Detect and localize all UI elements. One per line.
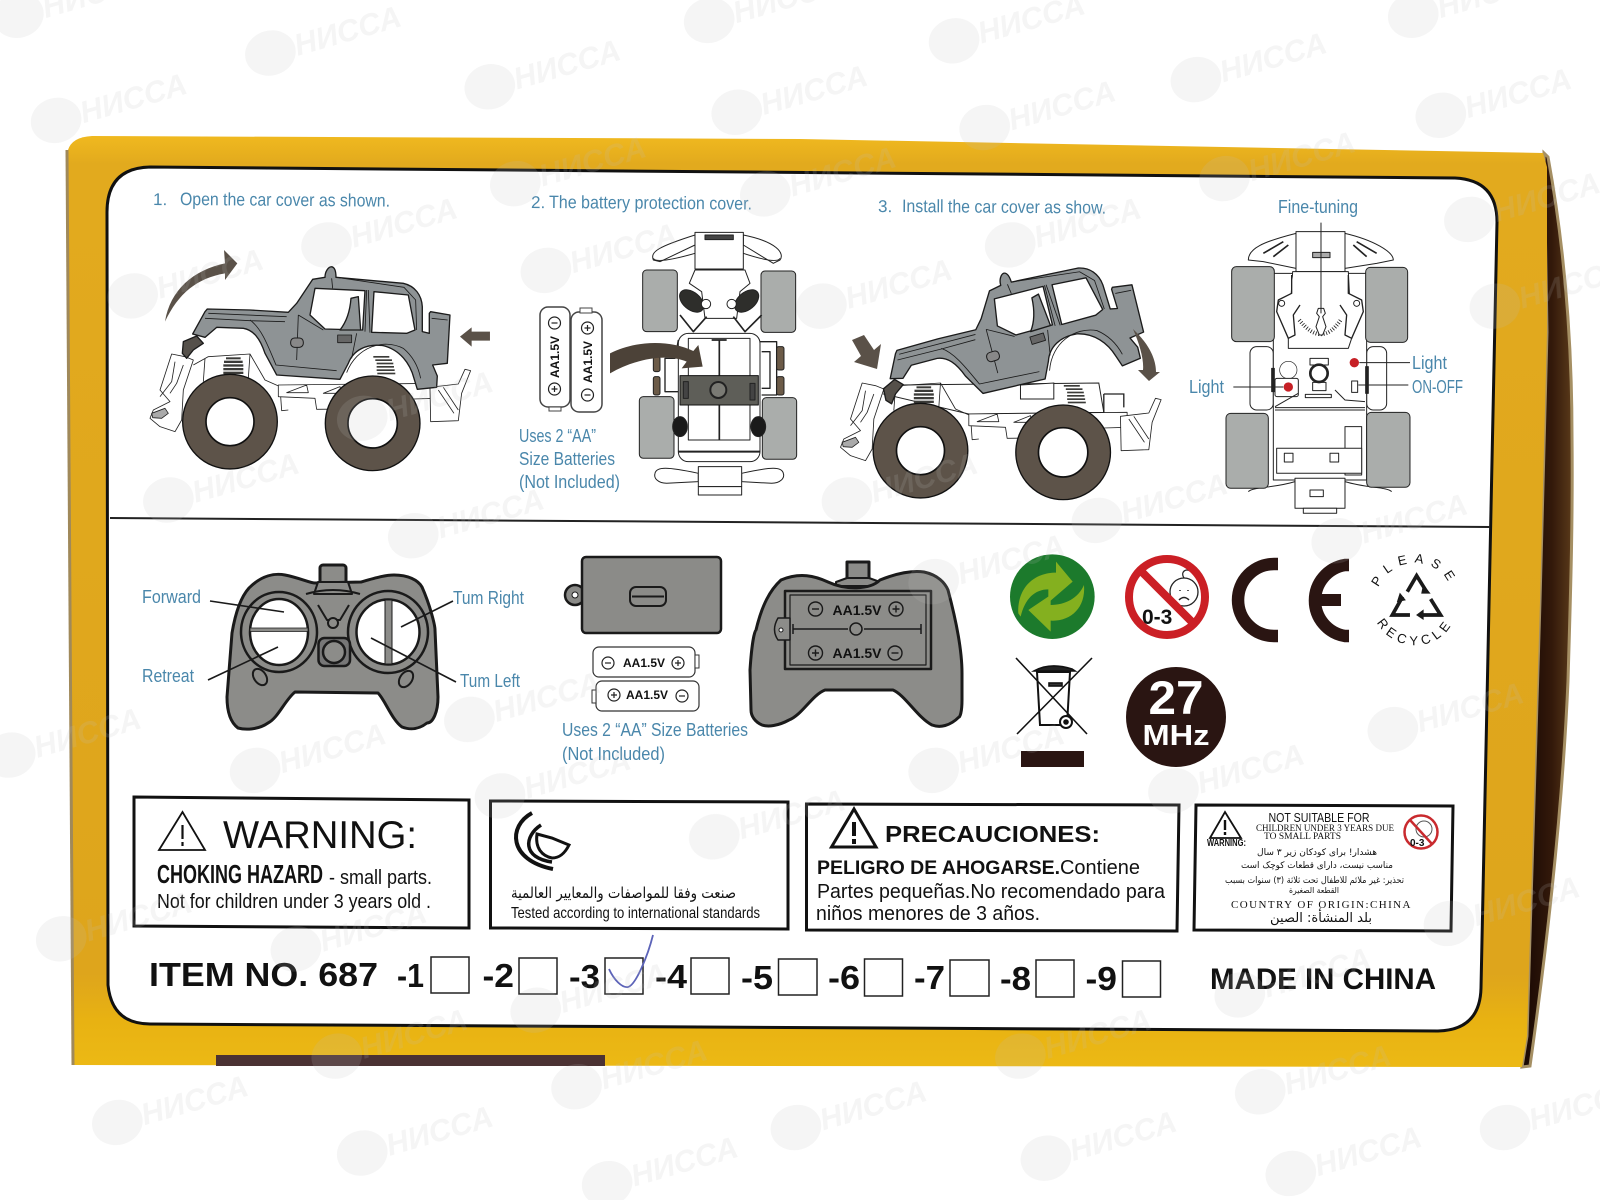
arrow: rotate down: [1133, 329, 1160, 381]
multi-language warning box: مناسب نیست، دارای قطعات کوچک است: [1241, 861, 1393, 871]
watermarks: НИССА: [566, 217, 681, 280]
watermarks: НИССА: [382, 365, 497, 428]
watermarks: НИССА: [30, 702, 145, 765]
icon: 27 MHz: MHz: [1142, 720, 1210, 752]
item number row: MADE IN CHINA: [1210, 963, 1436, 996]
battery note: [519, 426, 620, 492]
watermarks: НИССА: [867, 447, 982, 510]
watermarks: НИССА: [596, 1033, 711, 1096]
standards box: Tested according to international standards: [511, 905, 760, 922]
remote control back: AA1.5V: [832, 645, 882, 661]
multi-language warning box: بلد المنشأة: الصين: [1270, 908, 1372, 926]
multi-language warning box: WARNING:: [1207, 838, 1246, 849]
watermarks: НИССА: [346, 191, 461, 254]
watermarks: НИССА: [757, 59, 871, 122]
batteries vertical: AA1.5V: [548, 336, 562, 378]
arrow: push down: [852, 335, 881, 369]
icon: small age warning: 0-3: [1410, 838, 1425, 849]
icon: standards logo: [516, 813, 569, 869]
arrow: battery cover: [610, 343, 703, 373]
watermarks: НИССА: [1260, 941, 1374, 1004]
watermarks: НИССА: [357, 1003, 471, 1066]
variant checkboxes: [397, 957, 1160, 997]
remote battery note: [562, 720, 748, 764]
remote labels: Forward: [142, 587, 201, 607]
remote control back: AA1.5V: [832, 602, 882, 618]
warning box english: - small parts.: [329, 867, 432, 889]
watermarks: НИССА: [1311, 1120, 1426, 1183]
remote labels: Retreat: [142, 666, 194, 686]
yellow box: [67, 136, 1572, 1067]
remote batteries: [592, 647, 699, 711]
arrow: lift cover: [165, 250, 237, 322]
step 3 heading: 3.: [878, 197, 892, 216]
variant checkboxes: -7: [914, 959, 945, 996]
icon: small age warning: [1404, 816, 1438, 849]
box face: [68, 136, 1547, 1067]
box side opening: [1522, 153, 1572, 1067]
battery note: Uses 2 “AA”: [519, 426, 596, 446]
icon: please recycle: RECYCLE: [1377, 618, 1450, 646]
jeep closing cover: [840, 238, 1161, 500]
watermarks: НИССА: [1216, 26, 1331, 89]
standards box: [490, 801, 788, 929]
watermarks: НИССА: [1005, 74, 1119, 137]
precautions box: niños menores de 3 años.: [816, 903, 1040, 925]
variant checkboxes: -1: [397, 957, 424, 994]
remote batteries: AA1.5V: [626, 688, 668, 702]
variant checkboxes: -8: [1000, 960, 1031, 997]
watermarks: НИССА: [1413, 676, 1528, 739]
control labels: Fine-tuning: [1278, 197, 1358, 217]
chassis top view: controls: [1226, 223, 1410, 513]
watermarks: НИССА: [954, 528, 1068, 591]
control labels: [1189, 197, 1463, 397]
remote control back: [750, 562, 962, 726]
dark strip on bottom edge: [216, 1055, 605, 1066]
watermarks: НИССА: [734, 783, 849, 846]
variant checkboxes: -2: [482, 957, 514, 994]
precautions box: Partes pequeñas.No recomendado para: [817, 881, 1166, 903]
watermarks: НИССА: [535, 130, 650, 193]
multi-language warning box: TO SMALL PARTS: [1264, 831, 1341, 841]
watermarks: НИССА: [1193, 737, 1308, 800]
icon: 27 MHz: 27: [1148, 671, 1204, 724]
battery cover: [565, 557, 721, 633]
white panel: [107, 167, 1497, 1031]
remote labels: [142, 587, 524, 691]
warning box english: Not for children under 3 years old .: [157, 891, 431, 913]
icon: warning triangle: [832, 809, 876, 847]
watermarks: НИССА: [433, 482, 548, 545]
multi-language warning box: هشدار! برای کودکان زیر ۳ سال: [1257, 848, 1377, 858]
icon: please recycle: [1371, 554, 1456, 646]
remote labels: Tum Left: [460, 671, 520, 691]
standards box: صنعت وفقا للمواصفات والمعايير العالمية: [511, 884, 736, 902]
watermarks: НИССА: [1066, 1105, 1181, 1168]
icon: 27 MHz: [1126, 667, 1226, 767]
watermarks: НИССА: [556, 957, 670, 1020]
multi-language warning box: تحذير: غير ملائم للاطفال تحت ثلاثة (٣) سنوات بسبب: [1225, 876, 1404, 886]
chassis top view: battery cover: [610, 232, 797, 495]
watermarks: НИССА: [153, 243, 267, 305]
watermarks: НИССА: [316, 896, 431, 958]
watermarks: НИССА: [1117, 467, 1232, 530]
remote labels: Tum Right: [453, 588, 524, 608]
batteries vertical: AA1.5V: [581, 341, 595, 383]
watermarks: НИССА: [1244, 125, 1359, 188]
watermarks: НИССА: [382, 1100, 497, 1163]
precautions box: PELIGRO DE AHOGARSE.: [817, 858, 1060, 879]
variant checkboxes: -9: [1086, 960, 1117, 997]
multi-language warning box: COUNTRY OF ORIGIN:CHINA: [1231, 899, 1411, 911]
watermarks: НИССА: [1469, 870, 1584, 933]
battery note: (Not Included): [519, 472, 620, 492]
remote battery note: Uses 2 “AA” Size Batteries: [562, 720, 748, 740]
icon: crossed-out bin: [1016, 658, 1092, 767]
warning box english: CHOKING HAZARD: [157, 859, 323, 889]
jeep with cover opening: [150, 250, 490, 471]
control labels: Light: [1412, 353, 1447, 373]
arrow: push left: [460, 327, 490, 347]
watermarks: НИССА: [137, 1069, 252, 1132]
watermarks: НИССА: [76, 67, 191, 130]
item number row: ITEM NO. 687: [149, 956, 378, 993]
variant checkboxes: -4: [655, 958, 688, 995]
remote control front: [208, 565, 456, 729]
multi-language warning box: NOT SUITABLE FOR: [1268, 810, 1370, 825]
watermarks: НИССА: [510, 33, 624, 96]
multi-language warning box: CHILDREN UNDER 3 YEARS DUE: [1256, 823, 1394, 833]
watermarks: НИССА: [627, 1130, 742, 1193]
variant checkboxes: -6: [828, 959, 860, 996]
warning box english: WARNING:: [223, 814, 417, 857]
icon: not for age 0-3: [1129, 559, 1205, 635]
watermarks: НИССА: [816, 1074, 931, 1137]
item number row: [149, 935, 1436, 997]
watermarks: НИССА: [841, 253, 956, 316]
watermarks: НИССА: [1030, 191, 1145, 254]
step 2 heading: The battery protection cover.: [549, 192, 752, 214]
handwritten check mark: [609, 935, 653, 987]
watermarks: НИССА: [275, 717, 390, 780]
control labels: ON-OFF: [1412, 377, 1463, 397]
watermarks: НИССА: [489, 666, 604, 729]
watermarks: НИССА: [188, 447, 303, 510]
step 2 heading: 2.: [531, 193, 545, 212]
multi-language warning box: [1194, 805, 1453, 931]
watermarks: НИССА: [1280, 1038, 1395, 1101]
batteries vertical: [540, 307, 602, 412]
icon: please recycle: PLEASE: [1371, 554, 1456, 586]
precautions box: [806, 804, 1179, 931]
precautions box: PRECAUCIONES:: [885, 821, 1100, 847]
step 3 heading: Install the car cover as show.: [902, 196, 1106, 218]
remote battery note: (Not Included): [562, 744, 665, 764]
variant checkboxes: -3: [569, 958, 600, 995]
watermarks: НИССА: [1461, 62, 1576, 125]
control labels: Light: [1189, 377, 1224, 397]
icon: warning triangle: [159, 812, 205, 850]
precautions box: Contiene: [1060, 857, 1140, 879]
icon: warning triangle: [1210, 812, 1241, 838]
watermarks: НИССА: [81, 885, 196, 948]
watermarks: НИССА: [1357, 487, 1471, 550]
step 1 heading: 1.: [153, 190, 167, 209]
step 1 heading: Open the car cover as shown.: [180, 189, 390, 211]
watermarks: НИССА: [1040, 1003, 1155, 1066]
watermarks: НИССА: [785, 140, 900, 203]
icon: not for age 0-3: 0-3: [1142, 606, 1172, 629]
watermarks: НИССА: [954, 717, 1068, 780]
multi-language warning box: القطعة الصغيرة: [1289, 886, 1339, 895]
remote batteries: AA1.5V: [623, 656, 665, 670]
watermarks: НИССА: [520, 743, 635, 805]
variant checkboxes: -5: [741, 959, 773, 996]
icon: CE mark: [1238, 564, 1349, 636]
watermarks: НИССА: [290, 0, 405, 63]
warning box english: [134, 797, 469, 928]
battery note: Size Batteries: [519, 449, 615, 469]
icon: green dot: [1010, 554, 1095, 639]
